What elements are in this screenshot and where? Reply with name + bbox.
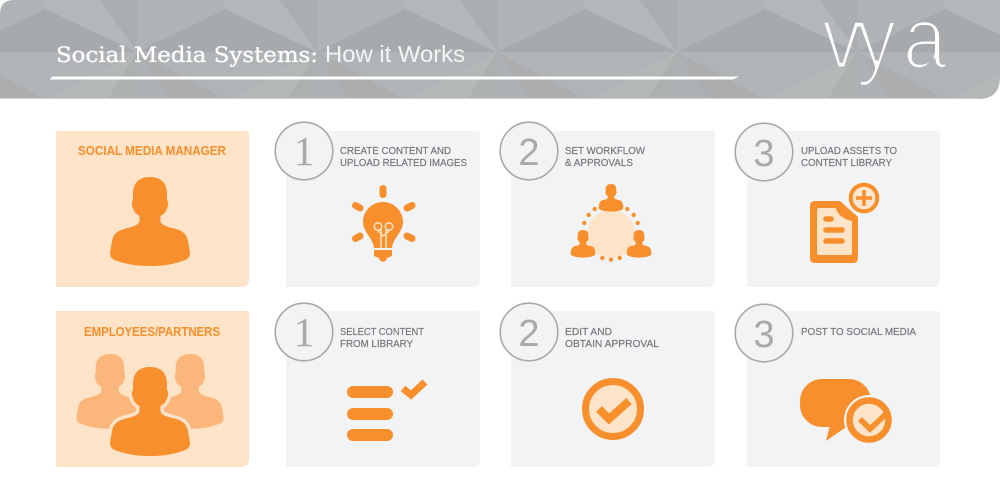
step text: CREATE CONTENT AND xyxy=(340,145,451,157)
panel: workflow step xyxy=(500,122,715,287)
heading: employees/partners: EMPLOYEES/PARTNERS xyxy=(84,325,220,339)
title: Social Media Systems: xyxy=(56,43,318,68)
icon: light bulb xyxy=(356,188,412,262)
number badge 1 xyxy=(275,122,333,180)
number badge 2 xyxy=(500,303,558,361)
panel: post to social media step xyxy=(735,304,940,467)
step text xyxy=(565,326,659,350)
icon: check in circle xyxy=(586,382,640,436)
number badge 2 xyxy=(500,122,558,180)
number badge 2: 2 xyxy=(518,132,540,174)
panel: employees and partners xyxy=(56,311,249,467)
step text: UPLOAD ASSETS TO xyxy=(801,145,897,157)
icon: three people workflow xyxy=(571,184,651,262)
number badge 3: 3 xyxy=(753,314,775,356)
icon: checklist xyxy=(347,382,425,441)
step text: FROM LIBRARY xyxy=(340,338,413,350)
number badge 3: 3 xyxy=(753,133,775,175)
step text xyxy=(565,145,645,169)
panel: upload assets step xyxy=(735,123,940,287)
title xyxy=(56,41,465,68)
panel: edit and approve step xyxy=(500,303,715,467)
header banner xyxy=(0,0,1000,99)
step text: SELECT CONTENT xyxy=(340,326,425,338)
step text: OBTAIN APPROVAL xyxy=(565,338,659,350)
step text: CONTENT LIBRARY xyxy=(801,157,892,169)
number badge 1 xyxy=(275,303,333,361)
step text: POST TO SOCIAL MEDIA xyxy=(801,326,916,338)
number badge 1: 1 xyxy=(294,309,314,355)
step text: SET WORKFLOW xyxy=(565,145,645,157)
heading: social media manager: SOCIAL MEDIA MANAGER xyxy=(78,144,226,158)
step text xyxy=(340,145,467,169)
step text: & APPROVALS xyxy=(565,157,633,169)
step text: UPLOAD RELATED IMAGES xyxy=(340,157,467,169)
icon: document with plus xyxy=(810,185,877,263)
number badge 2: 2 xyxy=(518,313,540,355)
number badge 3 xyxy=(735,304,793,362)
panel: select content step xyxy=(275,303,480,467)
step text xyxy=(801,145,897,169)
number badge 3 xyxy=(735,123,793,181)
panel: social media manager xyxy=(56,131,249,287)
title underline xyxy=(50,76,739,80)
panel: create content step xyxy=(275,122,480,287)
icon: group of people xyxy=(76,354,224,456)
icon: speech bubble with check xyxy=(800,379,894,445)
icon: person xyxy=(110,177,190,266)
number badge 1: 1 xyxy=(294,128,314,174)
title: How it Works xyxy=(325,41,465,67)
step text xyxy=(340,326,425,350)
step text: EDIT AND xyxy=(565,326,612,338)
